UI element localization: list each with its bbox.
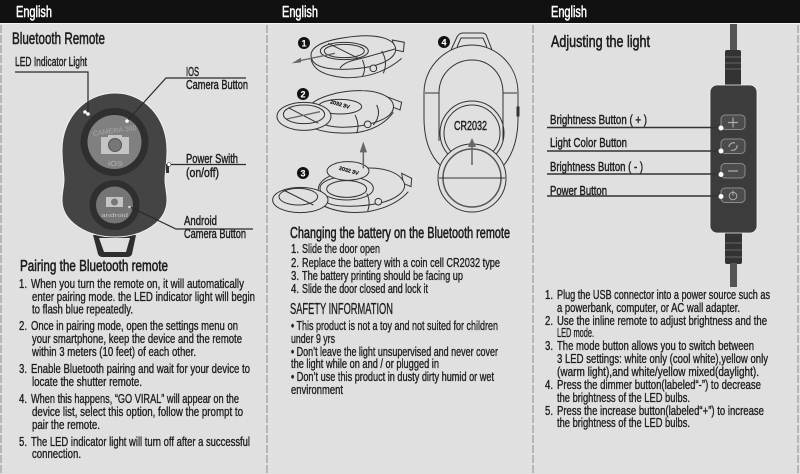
text: light steps: 3. bbox=[545, 339, 553, 353]
text: pairing steps: to flash blue repeatedly. bbox=[32, 302, 133, 316]
text: battery steps: 2. bbox=[291, 256, 299, 270]
icon: badge 2 bbox=[297, 88, 309, 100]
heading: changing the battery: Changing the battery on the Bluetooth remote bbox=[290, 225, 510, 242]
text: pairing steps: Once in pairing mode, open the settings menu on bbox=[31, 319, 238, 333]
text: light steps: 2. bbox=[545, 314, 553, 328]
icon: remote body bbox=[62, 93, 169, 237]
callout: light color bbox=[547, 136, 724, 154]
text: pairing steps: locate the shutter remote. bbox=[32, 375, 142, 389]
text: light steps: the brightness of the LED bulbs. bbox=[557, 391, 690, 405]
text: pairing steps: 4. bbox=[19, 392, 27, 406]
icon: remote body: android bbox=[101, 213, 128, 219]
callout: power button: Power Button bbox=[550, 184, 607, 198]
text: pairing steps: connection. bbox=[32, 447, 81, 461]
callout: brightness plus: Brightness Button ( + ) bbox=[550, 113, 647, 127]
text: pairing steps bbox=[19, 277, 255, 461]
icon: badge 3 bbox=[297, 167, 309, 179]
callout: LED indicator light bbox=[15, 55, 90, 116]
callout: brightness minus bbox=[547, 160, 724, 177]
callout: iOS camera button: Camera Button bbox=[186, 78, 248, 92]
text: pairing steps: 5. bbox=[19, 435, 27, 449]
heading: pairing: Pairing the Bluetooth remote bbox=[20, 258, 168, 275]
text: battery steps: 1. bbox=[291, 242, 299, 256]
text: pairing steps: Enable Bluetooth pairing and wait for your device to bbox=[31, 362, 250, 376]
callout: LED indicator light: LED Indicator Light bbox=[15, 55, 87, 69]
text: battery print in step 2: 2032 3V bbox=[329, 99, 351, 111]
callout: power button bbox=[547, 184, 724, 199]
text: pairing steps: device list, select this option, follow the prompt to bbox=[32, 405, 243, 419]
callout: android camera button: Camera Button bbox=[184, 227, 246, 241]
header bar: English bbox=[16, 4, 52, 21]
text: battery steps: 4. bbox=[291, 282, 299, 296]
text: safety bullets: environment bbox=[291, 383, 343, 397]
text: light steps: the brightness of the LED bulbs. bbox=[557, 416, 690, 430]
text: safety bullets bbox=[291, 319, 498, 397]
callout: iOS camera button bbox=[125, 65, 248, 123]
header bar bbox=[0, 0, 800, 24]
text: pairing steps: your smartphone, keep the device and the remote bbox=[32, 332, 242, 346]
header bar: English bbox=[282, 4, 318, 21]
icon: remote body: iOS bbox=[108, 161, 123, 168]
icon: badge 4 bbox=[438, 36, 450, 48]
callout: android camera button bbox=[128, 206, 253, 241]
callout: brightness minus: Brightness Button ( - ) bbox=[550, 160, 643, 174]
callout: android camera button: Android bbox=[184, 214, 217, 228]
text: light steps: LED mode. bbox=[557, 326, 594, 340]
text: battery steps: Slide the door closed and lock it bbox=[302, 282, 428, 296]
text: safety bullets: • Don’t leave the light unsupervised and never cover bbox=[291, 345, 498, 359]
callout: power switch bbox=[167, 152, 246, 180]
icon: step 2 replace battery bbox=[277, 91, 402, 133]
icon: badge 2: 2 bbox=[300, 90, 306, 100]
text: battery steps: Replace the battery with a coin cell CR2032 type bbox=[302, 256, 500, 270]
text: light steps: 4. bbox=[545, 378, 553, 392]
header bar: English bbox=[551, 4, 587, 21]
icon: step 3 battery printing up bbox=[273, 142, 412, 213]
icon: badge 1 bbox=[298, 37, 310, 49]
text: light steps bbox=[545, 288, 770, 430]
panel: adjusting the light bbox=[545, 24, 770, 430]
text: battery print in step 3: 2032 3V bbox=[338, 166, 360, 177]
text: light steps: 1. bbox=[545, 288, 553, 302]
text: pairing steps: 3. bbox=[19, 362, 27, 376]
heading: bluetooth remote: Bluetooth Remote bbox=[12, 30, 105, 48]
text: pairing steps: enter pairing mode. the LED indicator light will begin bbox=[32, 290, 255, 304]
text: pairing steps: 2. bbox=[19, 319, 27, 333]
icon: badge 3: 3 bbox=[300, 168, 306, 178]
callout: light color: Light Color Button bbox=[550, 136, 627, 150]
callout: brightness plus bbox=[547, 113, 724, 130]
text: pairing steps: When you turn the remote on, it will automatically bbox=[31, 277, 245, 291]
text: safety bullets: under 9 yrs bbox=[291, 332, 335, 346]
icon: step 4 CR2032 bbox=[424, 33, 519, 212]
text: safety bullets: • Don’t use this product in dusty dirty humid or wet bbox=[291, 370, 494, 384]
text: pairing steps: The LED indicator light will turn off after a successful bbox=[31, 435, 250, 449]
text: battery steps: 3. bbox=[291, 269, 299, 283]
text: pairing steps: within 3 meters (10 feet) of each other. bbox=[31, 345, 196, 359]
icon: step 1 slide door bbox=[292, 36, 404, 78]
text: pairing steps: pair the remote. bbox=[32, 418, 100, 432]
panel: bluetooth remote bbox=[12, 30, 255, 461]
callout: power switch: (on/off) bbox=[186, 166, 219, 180]
text: pairing steps: 1. bbox=[19, 277, 27, 291]
text: light steps: 5. bbox=[545, 404, 553, 418]
text: battery steps: The battery printing should be facing up bbox=[302, 269, 463, 283]
text: safety bullets: • This product is not a toy and not suited for children bbox=[291, 319, 498, 333]
panel: changing the battery bbox=[273, 33, 519, 397]
text: light steps: a powerbank, computer, or AC wall adapter. bbox=[557, 301, 740, 315]
heading: safety information: SAFETY INFORMATION bbox=[290, 301, 393, 318]
text: battery steps: Slide the door open bbox=[302, 242, 380, 256]
icon: remote body: CAMERA 360 bbox=[93, 125, 137, 138]
icon: badge 1: 1 bbox=[302, 38, 307, 48]
icon: badge 4: 4 bbox=[442, 38, 447, 48]
callout: iOS camera button: IOS bbox=[186, 65, 199, 79]
text: pairing steps: When this happens, “GO VIRAL” will appear on the bbox=[31, 392, 239, 406]
text: safety bullets: the light while on and / or plugged in bbox=[291, 357, 439, 371]
icon: remote strap bbox=[93, 235, 136, 257]
icon: step 4 CR2032: CR2032 bbox=[454, 118, 487, 133]
text: battery steps bbox=[291, 242, 500, 296]
icon: inline remote and cable bbox=[710, 24, 757, 287]
callout: power switch: Power Swith bbox=[186, 152, 238, 166]
heading: adjusting the light: Adjusting the light bbox=[551, 33, 650, 51]
